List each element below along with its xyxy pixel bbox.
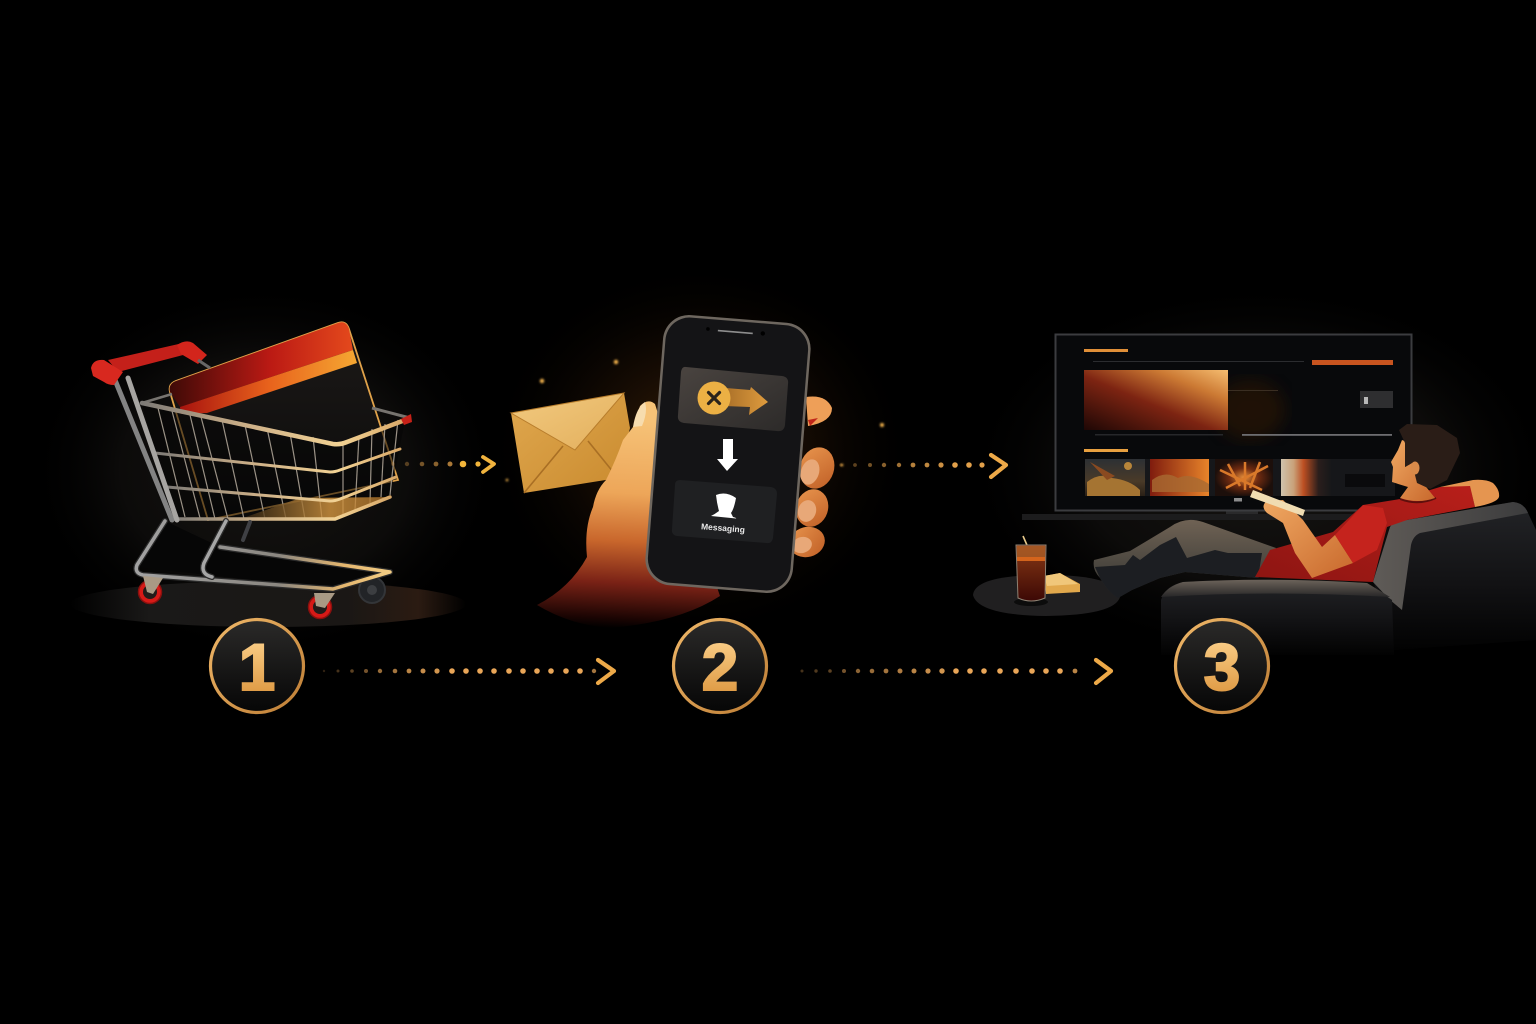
man: sleeve xyxy=(1335,505,1387,563)
trouser shadow xyxy=(1095,537,1262,598)
phone down arrow xyxy=(717,439,738,471)
basket floor mesh xyxy=(240,497,390,519)
ambient background glows xyxy=(25,260,1536,660)
badge 3: 3 xyxy=(1204,630,1240,704)
account label: Messaging xyxy=(701,521,745,535)
phone panel: skip arrow xyxy=(678,367,788,431)
dotted arrow: phone to TV xyxy=(839,455,1006,477)
basket shadow fill xyxy=(142,403,405,519)
badge 2 xyxy=(674,620,766,712)
dotted arrow: badge 2 to 3 xyxy=(800,660,1111,683)
drink glass xyxy=(1016,536,1046,601)
basket rails xyxy=(142,403,405,519)
TV header bars xyxy=(1084,349,1393,365)
badge 3 xyxy=(1176,620,1268,712)
phone body xyxy=(643,313,813,595)
credit card xyxy=(170,322,398,520)
step 1: shopping cart with card xyxy=(70,322,466,627)
front wheels xyxy=(138,576,335,618)
man: shirt xyxy=(1255,485,1475,582)
rim tip xyxy=(401,414,412,425)
step number badges xyxy=(210,620,1268,712)
TV screen xyxy=(1056,334,1412,510)
phone speaker xyxy=(706,327,765,336)
basket wires xyxy=(158,408,398,519)
envelope xyxy=(511,393,630,493)
TV logo xyxy=(1234,498,1242,502)
fingers xyxy=(786,396,840,561)
badge 1: 1 xyxy=(239,630,275,704)
sofa back xyxy=(1373,502,1536,650)
dotted arrow: cart to phone xyxy=(391,457,494,472)
sparkles xyxy=(506,360,884,481)
man: head xyxy=(1391,424,1460,501)
TV hero banner xyxy=(1084,370,1228,430)
TV thumbnail row xyxy=(1085,459,1395,496)
TV unit shelf xyxy=(1022,506,1397,520)
phone panel: account xyxy=(672,480,777,543)
remote control xyxy=(1250,490,1305,516)
basket back rails xyxy=(142,394,410,418)
rear wheels xyxy=(228,556,385,603)
cart floor shadow xyxy=(70,581,466,627)
step 3: person watching TV on sofa xyxy=(973,334,1536,655)
step 2: hand holding phone with envelope xyxy=(506,313,884,628)
dotted arrow: badge 1 to 2 xyxy=(323,660,614,683)
thumb nail xyxy=(633,402,646,427)
man: forearm and hand xyxy=(1264,500,1353,578)
cart tray xyxy=(137,521,390,589)
badge 1 xyxy=(210,620,304,712)
account icon xyxy=(711,494,736,518)
sofa seat cushion xyxy=(1161,580,1394,655)
hand palm xyxy=(537,401,720,628)
man: trousers xyxy=(1094,520,1276,598)
cart frame xyxy=(115,378,390,589)
man: raised arm behind head xyxy=(1440,480,1499,507)
cart handle xyxy=(91,341,210,385)
side table xyxy=(973,536,1120,616)
snack xyxy=(1044,573,1080,594)
TV detail lines and button xyxy=(1084,390,1393,452)
screen glow xyxy=(1215,380,1285,440)
badge 2: 2 xyxy=(702,630,738,704)
